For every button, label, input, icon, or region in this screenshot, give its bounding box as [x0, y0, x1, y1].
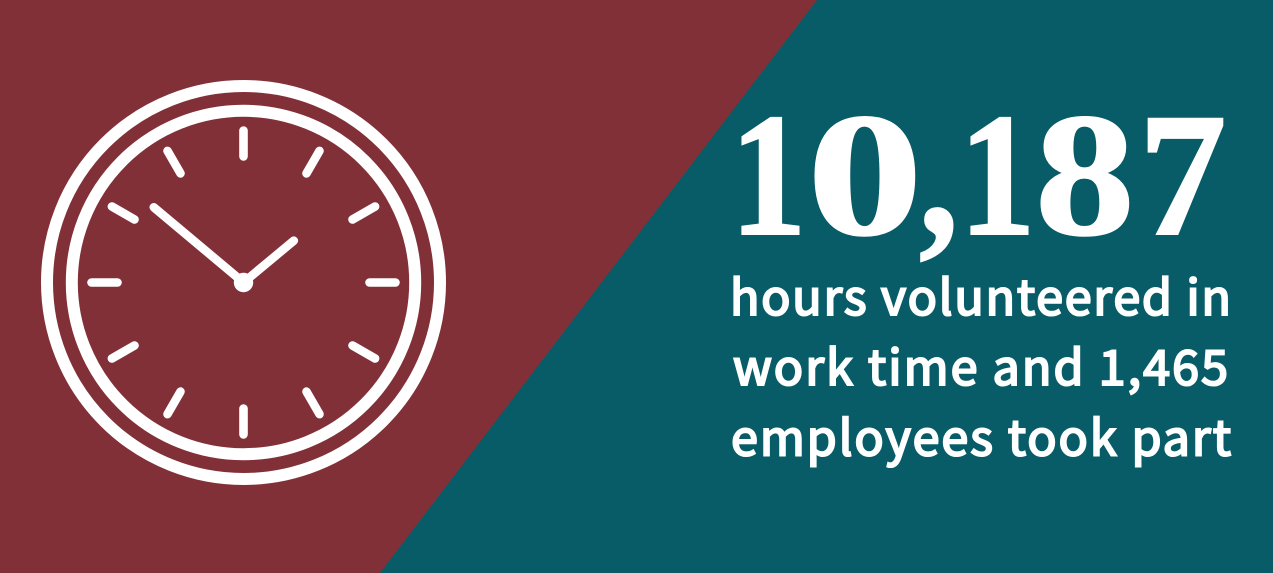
heading: 10,187: 1 [959, 78, 1036, 273]
text block: description: work time and 1,465 [733, 329, 1228, 399]
heading: 10,187: 8 [1035, 78, 1135, 273]
heading: 10,187: 7 [1139, 78, 1227, 273]
text block: description: employees took part [731, 400, 1231, 470]
text block: description [730, 259, 1231, 470]
heading: 10,187: 0 [807, 78, 923, 273]
panel: maroon diagonal background [0, 0, 817, 573]
text block: description: hours volunteered in [730, 259, 1231, 329]
heading: 10,187: , [919, 78, 959, 273]
icon: clock [47, 86, 440, 479]
heading: 10,187: 1 [730, 78, 806, 273]
